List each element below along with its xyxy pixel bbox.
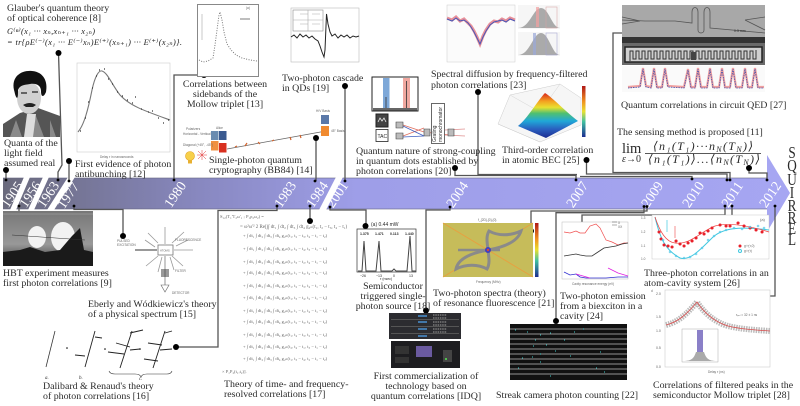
diagram: physical spectrum: PULSED [117, 239, 130, 243]
SQUIRREL vertical label: R [788, 210, 796, 227]
caption: third-order correlation: Third-order correlation [502, 145, 593, 156]
caption: first evidence of photon antibunching: antibunching [12] [75, 169, 145, 180]
formula: Glauber correlation function [7, 27, 182, 47]
caption: BB84: Single-photon quantum [209, 155, 302, 166]
chart: three-photon correlations: g⁽²⁾(τ) [744, 249, 752, 253]
chart: third-order correlation surface [498, 84, 586, 142]
equation block: time- and frequency-resolved correlations: + ∫ dt₁ ∫ dt₂ ∫ dt₃ ∫ dt₄ g₂ₙ(t₁, t₂ − t₃, t₄ − t₁ − t₂) [243, 283, 328, 289]
diagram: BB84 quantum cryptography: Diagonal (+45°, -45°) [183, 143, 213, 147]
caption: spectral diffusion [431, 69, 587, 91]
caption: semiconductor source [356, 281, 430, 312]
diagram: strong-coupling setup: monochromator [438, 107, 444, 142]
chart: Mollow sideband correlations: (a) [246, 6, 250, 10]
chart: semiconductor single-photon source: 1.471 [375, 232, 384, 236]
year labels on the timeline: 2010 [680, 179, 708, 211]
chart: two-photon emission from biexciton: Cavity resonance energy (eV) [572, 282, 614, 286]
formula: sensing limit: ⟨n₁(T₁)···n [653, 139, 715, 153]
caption: physical spectrum: Eberly and Wódkiewicz's theory [88, 299, 217, 310]
year labels on the timeline: 2011 [719, 179, 747, 211]
caption: two-photon cascade [282, 73, 364, 94]
chart: circuit QED correlations [622, 66, 765, 92]
diagram: BB84 quantum cryptography [183, 109, 345, 164]
chart: three-photon correlations: g⁽³⁾(τ,0) [744, 244, 754, 248]
caption: BB84 [209, 155, 313, 176]
caption: Mollow sideband correlations [183, 79, 267, 110]
SQUIRREL vertical label: R [788, 198, 796, 215]
equation block: time- and frequency-resolved correlations: + ∫ dt₁ ∫ dt₂ ∫ dt₃ ∫ dt₄ g₂ₙ(t₁, t₄ − t₃, t₂ − t₁ − t₂) [243, 332, 328, 338]
caption: three-photon correlations [644, 268, 769, 289]
caption: two-photon spectra: Two-photon spectra (theory) [433, 288, 546, 299]
chart: two-photon spectra of resonance fluorescence [443, 218, 538, 284]
image: IDQ rack equipment [389, 313, 461, 368]
caption: three-photon correlations: atom-cavity system [26] [644, 278, 740, 289]
chart: two-photon emission from biexciton: XX [618, 225, 623, 229]
SQUIRREL vertical label: S [788, 145, 796, 162]
equation block: time- and frequency-resolved correlations: + ∫ dt₁ ∫ dt₂ ∫ dt₃ ∫ dt₄ g₂ₙ(t₁, t₃ − t₂, t₄ − t₁ − t₂) [243, 259, 328, 265]
caption: physical spectrum: of a physical spectrum [15] [88, 309, 196, 320]
caption: third-order correlation: in atomic BEC [25] [502, 155, 580, 166]
caption: filtered peaks: semiconductor Mollow triplet [28] [653, 390, 790, 401]
chart: three-photon correlations: (a) [760, 217, 766, 222]
equation block: time- and frequency-resolved correlations: + ∫ dt₁ ∫ dt₂ ∫ dt₃ ∫ dt₄ g₂ₙ(t₁, t₂ − t₄, t₃ − t₁ − t₂) [243, 246, 328, 252]
chart: spectral diffusion [447, 5, 560, 62]
formula: sensing limit: N [742, 158, 749, 167]
formula: sensing limit: (T [723, 139, 736, 153]
caption: circuit QED: Quantum correlations in circuit QED [27] [621, 100, 786, 111]
diagram: BB84 quantum cryptography: H/V Basis [316, 109, 330, 113]
chart: semiconductor single-photon source: τ (nsec) [380, 277, 392, 281]
SQUIRREL vertical label: U [787, 172, 797, 189]
caption: Dalibard and Renaud [43, 381, 154, 402]
caption: Mollow sideband correlations: Mollow triplet [13] [187, 99, 263, 110]
diagram: physical spectrum: FLUORESCENCE [175, 238, 201, 242]
formula: sensing limit [622, 139, 761, 167]
equation block: time- and frequency-resolved correlations: × P₁P₂(t₁,t₂)]. [222, 369, 247, 375]
chart: two-photon spectra of resonance fluorescence: f_{2D},{0},{0} [478, 218, 496, 222]
caption: streak camera: Streak camera photon counting [22] [496, 390, 638, 401]
caption: quanta of the light field [4, 138, 58, 169]
chart: semiconductor single-photon source: 0 [393, 274, 395, 278]
caption: biexciton emission: Two-photon emission [560, 291, 646, 302]
caption: spectral diffusion: Spectral diffusion by frequency-filtered [431, 69, 587, 80]
diagram: physical spectrum [117, 227, 201, 295]
caption: physical spectrum [88, 299, 217, 320]
portrait: Einstein [3, 71, 60, 137]
caption: Mollow sideband correlations: sidebands of the [193, 89, 258, 100]
chart: semiconductor single-photon source: −26 [360, 274, 366, 278]
diagram: BB84 quantum cryptography: Polarizers [186, 127, 201, 131]
chart: two-photon spectra of resonance fluorescence: Frequency (MHz) [476, 280, 501, 284]
caption: biexciton emission: cavity [24] [560, 311, 603, 322]
caption: time- and frequency-resolved [224, 379, 348, 400]
SQUIRREL vertical label: I [790, 185, 794, 202]
caption: IDQ commercialization [371, 371, 481, 402]
image: circuit QED chip: 0.3 mm [734, 29, 746, 33]
equation block: time- and frequency-resolved correlations: + ∫ dt₁ ∫ dt₂ ∫ dt₃ ∫ dt₄ g₂ₙ(t₁, t₃ − t₄, t₂ − t₁ − t₂) [243, 295, 328, 301]
caption: IDQ commercialization: First commercialization of [374, 371, 479, 382]
chart: semiconductor single-photon source: 1.440 [405, 232, 414, 236]
year labels on the timeline: 2004 [444, 179, 472, 211]
chart: filtered peaks correlations: d [651, 289, 653, 293]
diagram: Dalibard and Renaud [45, 330, 172, 382]
caption: biexciton emission [560, 291, 646, 322]
equation block: time- and frequency-resolved correlations: + ∫ dt₁ ∫ dt₂ ∫ dt₃ ∫ dt₄ g₂ₙ(t₂, t₄ − t₁, t₃ − t₁ − t₂) [243, 344, 328, 350]
heading: sensing method: The sensing method is proposed [11] [617, 127, 763, 138]
chart: first evidence of antibunching: Delay τ in nanoseconds [100, 155, 134, 159]
caption: semiconductor source: Semiconductor [363, 281, 424, 292]
formula: sensing limit: N [735, 145, 742, 154]
SQUIRREL vertical label: Q [787, 158, 797, 175]
heading: Glauber's theory [7, 3, 109, 24]
year labels on the timeline: 1980 [162, 179, 190, 211]
chart: semiconductor single-photon source: 13 [409, 274, 413, 278]
diagram: physical spectrum: ATOMS [160, 248, 170, 252]
caption: quanta of the light field: light field [4, 148, 43, 159]
formula: sensing limit: ε→0 [622, 154, 641, 165]
formula: sensing limit: N [715, 145, 722, 154]
year labels on the timeline: 1956 [17, 179, 45, 211]
image: HBT experiment dishes [3, 211, 93, 266]
formula: sensing limit: (T [730, 152, 743, 166]
chart: three-photon correlations: 1.3 [641, 216, 646, 220]
chart: three-photon correlations: 1.1 [641, 244, 646, 248]
caption: first evidence of photon antibunching [75, 159, 171, 180]
chart: two-photon cascade [291, 8, 359, 62]
caption: biexciton emission: from a biexciton in a [560, 301, 643, 312]
SQUIRREL vertical label [787, 145, 797, 249]
caption: filtered peaks [653, 380, 794, 401]
equation block: time- and frequency-resolved correlations [220, 214, 348, 375]
caption: Dalibard and Renaud: Dalibard & Renaud's theory [43, 381, 154, 392]
chart: semiconductor single-photon source: 0.113 [390, 232, 399, 236]
equation block: time- and frequency-resolved correlations: = ω²ω'² 2 Re[∫∫ dt₁ ∫ dt₂ ∫ dt₃ ∫ dt₄ g₂ₙ(t₁, t₂ − t₃, t₄ − t₁) [240, 224, 348, 230]
SQUIRREL vertical label: E [788, 221, 796, 238]
diagram: Dalibard and Renaud: b. [79, 376, 83, 381]
caption: quanta of the light field: assumed real [4, 158, 56, 169]
chart: three-photon correlations: 1.0 [641, 257, 646, 261]
caption: filtered peaks: Correlations of filtered peaks in the [653, 380, 794, 391]
year labels on the timeline: 1983 [272, 179, 300, 211]
chart: semiconductor single-photon source [357, 222, 416, 281]
caption: two-photon spectra: of resonance fluorescence [21] [433, 298, 554, 309]
caption: third-order correlation [502, 145, 593, 166]
caption: HBT: first photon correlations [9] [3, 278, 112, 289]
year labels on the timeline: 1963 [35, 179, 63, 211]
caption: two-photon cascade: in QDs [19] [282, 83, 329, 94]
caption: three-photon correlations: Three-photon correlations in an [644, 268, 769, 279]
caption: BB84: cryptography (BB84) [14] [209, 165, 313, 176]
caption: IDQ commercialization: technology based on [385, 381, 467, 392]
chart: semiconductor single-photon source: 1.375 [360, 232, 369, 236]
caption: two-photon cascade: Two-photon cascade [282, 73, 364, 84]
chart: filtered peaks correlations: τᵩₒₗ = 32 ± 1 ns [736, 313, 758, 317]
year labels on the timeline: 2012 [757, 179, 785, 211]
heading: Glauber's theory: of optical coherence [8] [7, 13, 101, 24]
year labels on the timeline [0, 179, 785, 212]
caption: two-photon spectra [433, 288, 554, 309]
heading: Glauber's theory: Glauber's quantum theory [7, 3, 109, 14]
diagram: strong-coupling setup: Grating [432, 125, 438, 142]
diagram: Dalibard and Renaud: c. [139, 377, 142, 382]
chart: filtered peaks correlations: 0.5 [656, 346, 661, 350]
chart: Mollow sideband correlations [198, 4, 258, 76]
caption: HBT [3, 268, 112, 289]
chart: filtered peaks correlations: 1.5 [656, 315, 661, 319]
chart: filtered peaks correlations: 1.0 [656, 329, 661, 333]
caption: semiconductor source: photon source [18] [356, 301, 430, 312]
chart: filtered peaks correlations: 0.0 [656, 365, 661, 369]
chart: two-photon emission from biexciton: X [618, 221, 621, 225]
year labels on the timeline: 1977 [55, 180, 83, 212]
caption: HBT: HBT experiment measures [3, 268, 109, 279]
chart: two-photon emission from biexciton [562, 221, 628, 286]
equation block: time- and frequency-resolved correlations: + ∫ dt₁ ∫ dt₂ ∫ dt₃ ∫ dt₄ g₂ₙ(t₁, t₂ − t₃, t₄ − t₁ − t₂) [243, 233, 328, 239]
formula: Glauber correlation function: G⁽ⁿ⁾(x₁ ··· xₙ,xₙ₊₁ ··· x₂ₙ) [7, 27, 95, 36]
caption: Dalibard and Renaud: of photon correlations [16] [43, 391, 149, 402]
chart: filtered peaks correlations: Delay τ (ns) [708, 370, 725, 374]
year labels on the timeline: 2009 [639, 179, 667, 211]
image: circuit QED chip [622, 5, 765, 65]
diagram: physical spectrum: EXCITATION [117, 243, 136, 247]
caption: strong coupling: Quantum nature of strong-coupling [356, 146, 496, 157]
caption: strong coupling: in quantum dots established by [356, 156, 478, 167]
timeline arrow band [3, 155, 790, 232]
equation block: time- and frequency-resolved correlations: + ∫ dt₁ ∫ dt₂ ∫ dt₃ ∫ dt₄ g₂ₙ(t₁, t₃ − t₄, t₂ − t₁ − t₂) [243, 356, 328, 362]
chart: three-photon correlations [641, 215, 769, 261]
caption: strong coupling [356, 146, 496, 177]
chart: semiconductor single-photon source: −13 [376, 274, 382, 278]
diagram: physical spectrum: DETECTOR [172, 291, 190, 295]
diagram: BB84 quantum cryptography: 45° Basis [331, 129, 345, 133]
chart: three-photon correlations: 1.2 [641, 230, 646, 234]
year labels on the timeline: 2001 [324, 179, 352, 211]
caption: spectral diffusion: photon correlations [23] [431, 80, 526, 91]
equation block: time- and frequency-resolved correlations: + ∫ dt₁ ∫ dt₂ ∫ dt₃ ∫ dt₄ g₂ₙ(t₂, t₁ − t₃, t₄ − t₁ − t₂) [243, 270, 328, 276]
formula: sensing limit: )⟩ [749, 152, 760, 166]
year labels on the timeline: 2007 [564, 179, 592, 211]
caption: Mollow sideband correlations: Correlations between [183, 79, 267, 90]
year labels on the timeline: 1984 [304, 179, 332, 211]
formula: sensing limit: lim [622, 141, 642, 157]
caption: time- and frequency-resolved: Theory of time- and frequency- [224, 379, 348, 390]
diagram: strong-coupling setup [372, 77, 465, 144]
diagram: physical spectrum: FILTER [175, 269, 186, 273]
formula: sensing limit: N [722, 158, 729, 167]
caption: time- and frequency-resolved: resolved correlations [17] [224, 389, 325, 400]
caption: IDQ commercialization: quantum correlations [IDQ] [371, 391, 481, 402]
equation block: time- and frequency-resolved correlations: + ∫ dt₁ ∫ dt₂ ∫ dt₃ ∫ dt₄ g₂ₙ(t₃, t₁ − t₂, t₄ − t₁ − t₂) [243, 308, 328, 314]
chart: filtered peaks correlations: 2.0 [656, 292, 661, 296]
diagram: BB84 quantum cryptography: Horizontal - Vertical [183, 132, 211, 136]
chart: filtered peaks correlations [651, 289, 770, 374]
caption: strong coupling: photon correlations [20] [356, 166, 451, 177]
formula: Glauber correlation function: = tr{ρE⁽⁻⁾(x₁ ··· E⁽⁻⁾xₙ)E⁽⁺⁾(xₙ₊₁) ··· E⁽⁺⁾(x₂ₙ)}. [7, 38, 182, 47]
equation block: time- and frequency-resolved correlations: S₁₂(T₁'T₂ω'₁ ; P₁ρ₂ω₂) = [220, 214, 264, 219]
caption: first evidence of photon antibunching: First evidence of photon [75, 159, 171, 170]
diagram: strong-coupling setup: TAC [378, 134, 388, 140]
image: streak camera counting [510, 324, 627, 380]
diagram: Dalibard and Renaud: a. [45, 376, 49, 381]
caption: quanta of the light field: Quanta of the [4, 138, 58, 149]
formula: sensing limit: )⟩ [742, 139, 753, 153]
SQUIRREL vertical label: L [788, 232, 796, 249]
diagram: BB84 quantum cryptography: Alice [216, 126, 223, 130]
formula: sensing limit: ⟨n₁(T₁)⟩...⟨n [648, 152, 722, 166]
chart: semiconductor single-photon source: (a) 0.44 mW [371, 222, 399, 228]
chart: first evidence of antibunching [77, 63, 170, 159]
caption: semiconductor source: triggered single- [360, 291, 426, 302]
connector lines and markers [3, 30, 776, 350]
equation block: time- and frequency-resolved correlations: + ∫ dt₁ ∫ dt₂ ∫ dt₃ ∫ dt₄ g₂ₙ(t₁, t₂ − t₃, t₄ − t₁ − t₂) [243, 319, 328, 325]
